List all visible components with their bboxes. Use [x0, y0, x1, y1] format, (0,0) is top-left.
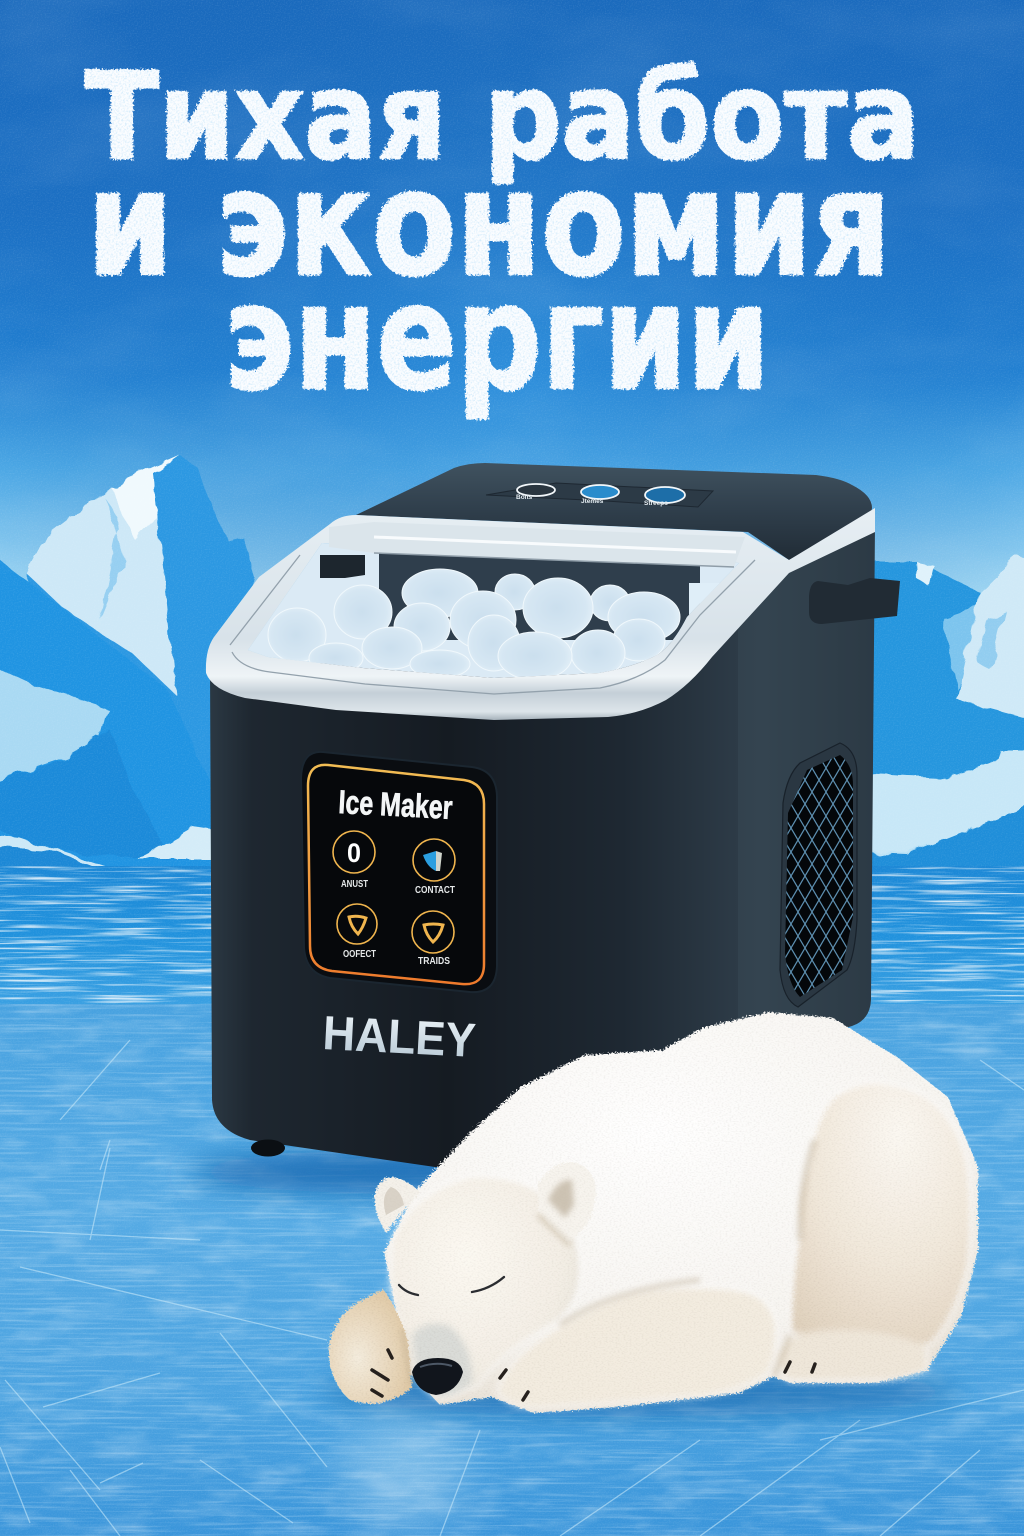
title line 3: энергии	[224, 253, 770, 423]
bear closed eyes	[399, 1277, 504, 1295]
machine shadow on ice	[190, 1150, 650, 1194]
bear foreleg	[497, 1286, 777, 1408]
panel heading: Ice Maker	[338, 783, 454, 826]
button: anust: 0	[347, 838, 361, 868]
ice bin interior	[248, 543, 739, 678]
lid handle	[329, 522, 745, 567]
bear nose	[412, 1358, 463, 1395]
bear hindquarter	[790, 1082, 971, 1345]
bear right ear	[538, 1162, 596, 1243]
background: right icebergs	[850, 557, 1024, 872]
bear body	[384, 1012, 978, 1413]
title line 2: и экономия	[87, 139, 891, 309]
control panel	[301, 752, 497, 992]
inner ear left	[384, 1187, 404, 1215]
button: anust	[333, 831, 375, 890]
bear ears and paw	[328, 1162, 596, 1404]
background: frozen ice floor	[0, 1004, 1024, 1536]
lid top	[356, 463, 872, 560]
lid button strip	[486, 483, 713, 507]
lid button 3: Streeps	[644, 500, 668, 507]
machine side panel	[650, 525, 875, 1100]
button: contact	[413, 839, 455, 896]
title line 1: Тихая работа	[85, 48, 920, 187]
bear hind paw	[777, 1330, 927, 1381]
background: sky	[0, 0, 1024, 880]
lid button 1: Bolts	[516, 494, 533, 501]
side seam	[736, 810, 738, 1010]
paw claws	[372, 1350, 815, 1400]
machine foot	[251, 1140, 285, 1156]
bear shadow	[320, 1368, 960, 1416]
inner ear right	[548, 1180, 574, 1218]
left bin bracket	[320, 555, 365, 578]
background: open water	[0, 866, 1024, 1006]
bin back wall	[379, 545, 700, 640]
rim grooves	[230, 555, 755, 694]
brand name: HALEY	[321, 1007, 477, 1068]
background: left icebergs	[0, 455, 255, 880]
ice maker appliance	[190, 463, 900, 1194]
side handle	[809, 578, 900, 624]
fur shading creases	[402, 1140, 815, 1385]
lid button 2: Jtemes	[581, 498, 604, 505]
ice balls	[268, 569, 680, 680]
lid button 3	[644, 487, 685, 507]
button: anust: ANUST	[341, 879, 368, 890]
bear left ear	[374, 1177, 420, 1233]
bear muzzle	[412, 1323, 472, 1398]
button: contact: CONTACT	[415, 885, 455, 896]
lid button 2	[581, 485, 619, 505]
panel bezel	[301, 752, 497, 992]
polar bear	[320, 1012, 978, 1416]
button: traids	[412, 911, 454, 967]
title	[85, 48, 920, 423]
bear inner fur masses	[390, 1082, 971, 1408]
button: traids: TRAIDS	[418, 956, 450, 967]
button: oofect: OOFECT	[343, 949, 376, 960]
silver rim	[206, 508, 875, 720]
bear front paw left	[328, 1290, 412, 1404]
bear head	[390, 1176, 581, 1400]
side air vent	[780, 743, 857, 1007]
lid button 1	[516, 484, 555, 501]
panel glowing frame	[308, 765, 484, 984]
button: oofect	[337, 904, 377, 960]
right bin wall	[689, 583, 720, 615]
machine front panel	[210, 600, 738, 1170]
